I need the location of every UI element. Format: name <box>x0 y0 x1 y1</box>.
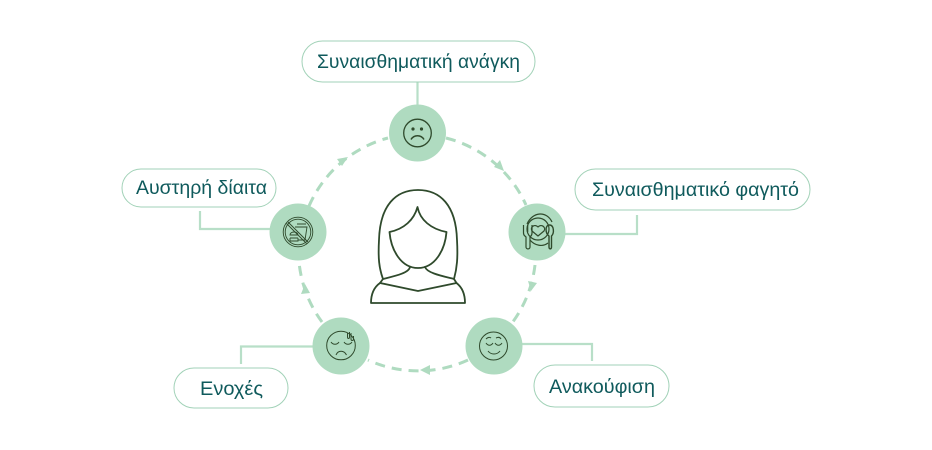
label: emotional eating <box>575 169 810 210</box>
label: guilt: Ενοχές <box>200 379 263 400</box>
node: no fast food icon <box>270 204 326 260</box>
label: guilt <box>174 368 288 408</box>
node: relieved face <box>466 318 522 374</box>
label: strict diet <box>122 169 276 207</box>
connector lines <box>200 82 637 364</box>
label: emotional eating: Συναισθηματικό φαγητό <box>592 180 799 201</box>
label: relief <box>534 365 669 407</box>
node: plate with heart, fork and spoon <box>508 204 566 260</box>
node: guilty face <box>312 318 370 374</box>
label: strict diet: Αυστηρή δίαιτα <box>136 178 267 199</box>
cycle arrowheads <box>301 157 537 375</box>
label: emotional need <box>302 41 535 82</box>
dashed cycle ring <box>299 138 535 371</box>
label: relief: Ανακούφιση <box>549 377 655 398</box>
central woman figure <box>371 190 465 303</box>
label: emotional need: Συναισθηματική ανάγκη <box>317 52 520 73</box>
node: sad face <box>389 104 446 162</box>
